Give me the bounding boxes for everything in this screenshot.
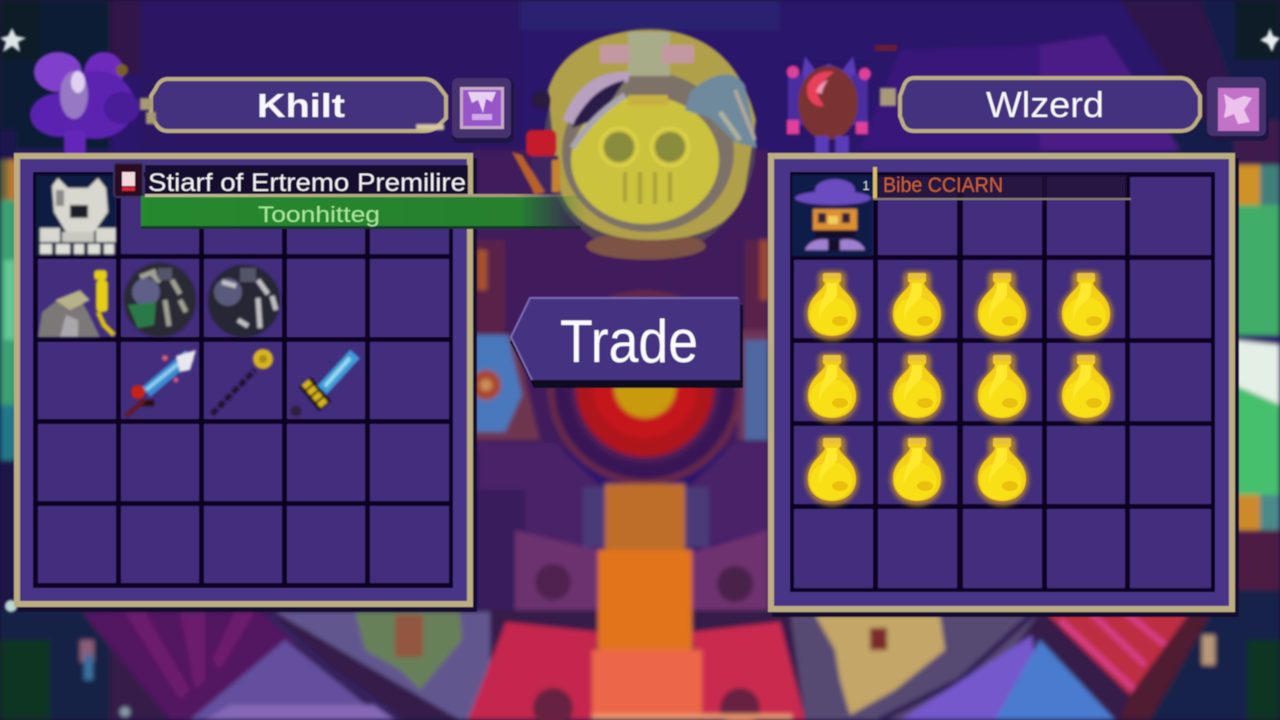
item: golden mace	[212, 349, 273, 414]
item: frost sword	[126, 350, 196, 416]
item: wizard portrait	[792, 175, 873, 256]
left name text: Khilt	[257, 87, 345, 124]
background: right strip	[1234, 120, 1280, 720]
button: trade	[510, 298, 743, 388]
banner ornament	[140, 98, 444, 130]
right banner icon	[1207, 77, 1269, 141]
left banner icon	[452, 78, 514, 143]
tooltip name text: Stiarf of Ertremo Premilire	[148, 169, 466, 197]
left character icon: purple crystal creature	[30, 52, 140, 156]
right character icon: dark orb ornament	[786, 45, 897, 154]
item count: 1	[862, 178, 870, 193]
right name text: Wlzerd	[986, 84, 1104, 125]
background: top corners	[0, 0, 1280, 160]
item: ice sword	[291, 354, 355, 416]
medallion crown	[600, 32, 694, 76]
right name banner	[900, 78, 1200, 131]
left name banner	[140, 79, 446, 131]
item: armor knight	[36, 175, 116, 256]
tooltip icon	[114, 163, 143, 197]
tooltip text: Bibe CCIARN	[883, 174, 1003, 197]
item: mossy boulder	[124, 263, 196, 337]
medallion left arc	[563, 72, 630, 148]
tooltip: green rarity bar	[141, 194, 586, 229]
skull medallion	[544, 28, 757, 260]
background: centre column	[471, 150, 768, 485]
tooltip: left item name	[114, 163, 468, 197]
panel: right player inventory	[768, 153, 1239, 617]
left inventory cells	[38, 177, 449, 583]
trade label: Trade	[560, 308, 698, 375]
panel: left player inventory	[14, 153, 477, 612]
background: lower blocks and carpet	[478, 443, 768, 636]
potions: gold flasks	[805, 271, 1113, 506]
background: left strip	[0, 130, 110, 720]
item: rock with golden staff	[38, 270, 114, 337]
right inventory cells	[794, 177, 1211, 588]
item: grey boulder	[208, 265, 280, 337]
small red figure	[512, 91, 560, 195]
background: bottom mural	[80, 484, 1280, 720]
medallion right arc	[685, 75, 757, 148]
skull eyes	[600, 95, 689, 204]
rarity bar text: Toonhitteg	[258, 202, 380, 227]
tooltip: right item name	[862, 167, 1131, 200]
